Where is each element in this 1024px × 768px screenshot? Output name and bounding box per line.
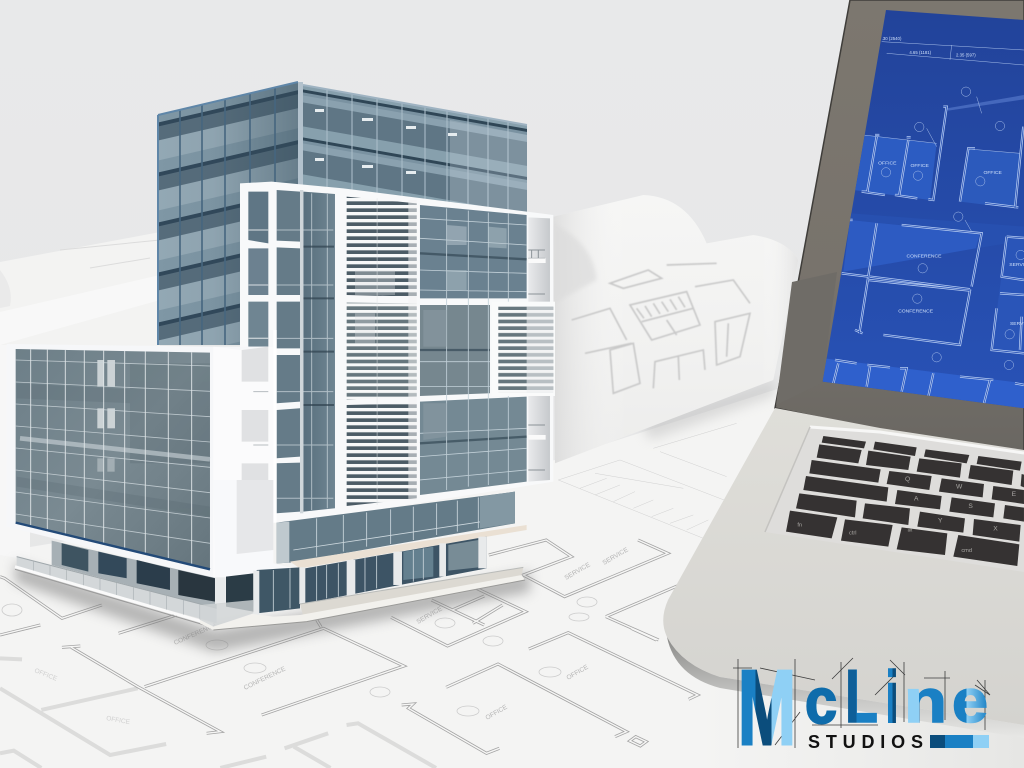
laptop front lip bbox=[667, 637, 1024, 738]
canopy bbox=[290, 525, 527, 568]
key labels: W bbox=[956, 484, 963, 491]
logo construction lines bbox=[733, 658, 990, 748]
tower right face bbox=[298, 82, 527, 345]
logo wordmark: L bbox=[845, 654, 878, 738]
center louvers bbox=[347, 197, 417, 506]
screen labels: OFFICE bbox=[911, 163, 929, 169]
ground floor bbox=[15, 541, 217, 628]
key labels: ctrl bbox=[849, 531, 857, 537]
keyboard well bbox=[765, 427, 1024, 572]
floor plan room labels: SERVICE bbox=[602, 546, 630, 567]
key labels: fn bbox=[797, 523, 802, 529]
floor plan room labels: OFFICE bbox=[566, 663, 590, 682]
logo subtitle: STUDIOS bbox=[808, 732, 923, 752]
logo wordmark: M bbox=[738, 649, 796, 767]
floor plan room labels: CONFERENCE bbox=[243, 665, 287, 692]
laptop base bbox=[663, 408, 1024, 725]
screen labels: OFFICE bbox=[878, 160, 897, 166]
logo wordmark: n bbox=[904, 667, 947, 735]
logo colour bars bbox=[930, 735, 989, 748]
table plan behind right bbox=[558, 423, 737, 538]
ceiling lights bbox=[315, 109, 457, 174]
logo wordmark: i bbox=[885, 657, 899, 738]
logo wordmark: e bbox=[952, 667, 988, 735]
roll body bbox=[553, 195, 798, 463]
screen labels: 4.65 (1181) bbox=[909, 50, 932, 55]
right opening bbox=[528, 217, 550, 482]
key labels: X bbox=[993, 525, 998, 532]
keyboard keys bbox=[786, 436, 1024, 566]
key labels bbox=[797, 476, 1017, 554]
screen labels bbox=[878, 36, 1024, 327]
key labels: Q bbox=[905, 476, 910, 483]
front frame block bbox=[240, 182, 555, 523]
screen labels: .30 (2540) bbox=[882, 36, 902, 41]
lower white block bbox=[7, 330, 277, 628]
screen labels: 2.35 (597) bbox=[956, 53, 976, 58]
logo: McLine Studios bbox=[733, 649, 990, 767]
screen labels: OFFICE bbox=[984, 170, 1002, 176]
glass curtain wall bbox=[16, 349, 210, 569]
right paper roll bbox=[553, 195, 798, 463]
floor plan room labels: OFFICE bbox=[106, 715, 131, 726]
left paper roll bbox=[0, 232, 160, 560]
key labels: A bbox=[914, 496, 919, 503]
screen labels: CONFERENCE bbox=[907, 254, 942, 260]
key labels: E bbox=[1012, 491, 1017, 498]
key labels: Y bbox=[938, 518, 943, 525]
laptop screen blueprint bbox=[823, 10, 1024, 408]
laptop bbox=[663, 0, 1024, 738]
key labels: cmd bbox=[961, 548, 972, 554]
left glass bay bbox=[277, 190, 300, 513]
building ground shadow bbox=[15, 562, 530, 652]
ground glass bbox=[257, 567, 300, 613]
building bbox=[7, 82, 555, 652]
railing and platform bbox=[300, 567, 523, 617]
right glass panels bbox=[420, 205, 527, 495]
plan room tags bbox=[2, 597, 597, 716]
floor plan drawing bbox=[0, 540, 698, 768]
upper storey glass bbox=[277, 492, 515, 563]
floor plan room labels: SERVICE bbox=[564, 561, 592, 582]
floor plan room labels: CONFERENCE bbox=[173, 622, 218, 647]
small louver panel bbox=[492, 302, 555, 396]
floor plan room labels: OFFICE bbox=[33, 667, 59, 683]
side wing balconies bbox=[243, 192, 268, 503]
floor plan room labels: OFFICE bbox=[484, 703, 509, 722]
key labels: S bbox=[968, 503, 973, 510]
podium and canopy bbox=[200, 480, 527, 630]
logo wordmark: c bbox=[805, 665, 837, 737]
tower left face bbox=[158, 82, 298, 345]
logo wordmark bbox=[738, 649, 988, 767]
roll sketch bbox=[572, 263, 750, 393]
floor plan room labels bbox=[33, 546, 630, 726]
laptop lid bezel bbox=[775, 0, 1024, 452]
roll shadow bbox=[640, 380, 775, 440]
floor plan room labels: SERVICE bbox=[416, 605, 444, 626]
screen dimension lines bbox=[863, 42, 1024, 370]
paper floor with plan bbox=[0, 385, 1024, 768]
screen labels: CONFERENCE bbox=[898, 308, 934, 314]
key labels: alt bbox=[908, 528, 913, 533]
